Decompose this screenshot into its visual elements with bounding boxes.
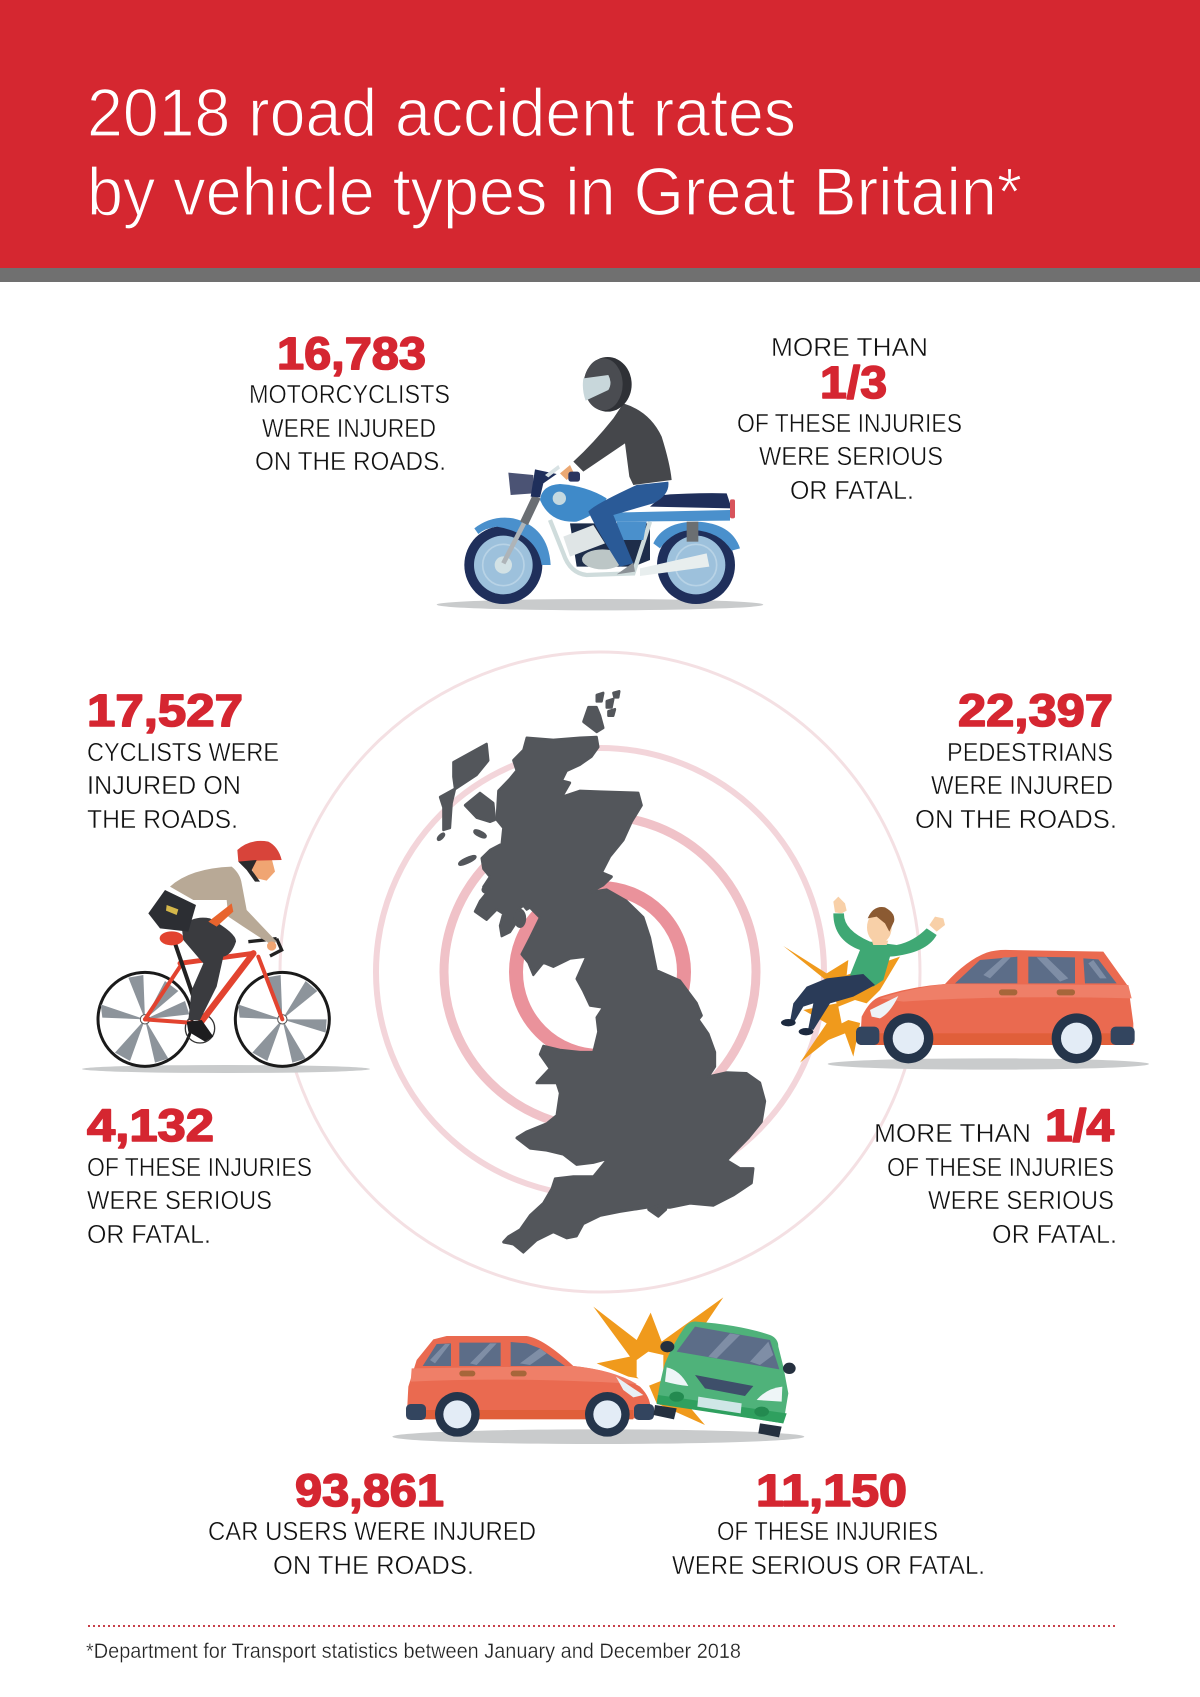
stat: cyclists serious injuries: 4,132 [87,1100,214,1151]
stat: cyclists [87,685,279,834]
stat: pedestrians serious share: OR FATAL. [992,1219,1117,1249]
stat: motorcyclists serious share: WERE SERIOUS [759,441,943,471]
stat: pedestrians: PEDESTRIANS [947,737,1113,767]
title: by vehicle types in Great Britain* [87,154,1022,230]
stat: motorcyclists serious share: 1/3 [820,357,887,408]
stat: car users serious injuries: 11,150 [756,1465,907,1516]
icon: car collision [392,1297,804,1444]
stat: cyclists: INJURED ON [87,770,241,800]
stat: motorcyclists: WERE INJURED [262,413,436,443]
stat: cyclists serious injuries: WERE SERIOUS [87,1185,272,1215]
stat: motorcyclists serious share: MORE THAN [771,332,928,362]
stat: car users: 93,861 [295,1465,444,1516]
title: 2018 road accident rates [87,75,796,151]
icon: pedestrian hit by car [781,897,1149,1070]
stat: pedestrians serious share: 1/4 [1045,1100,1114,1151]
stat: motorcyclists: ON THE ROADS. [255,446,446,476]
footnote: *Department for Transport statistics between January and December 2018 [86,1640,741,1663]
stat: pedestrians: WERE INJURED [931,770,1113,800]
header banner [0,0,1200,282]
stat: pedestrians: ON THE ROADS. [915,804,1117,834]
map of Great Britain [437,691,765,1252]
stat: cyclists: 17,527 [87,685,243,736]
icon: motorcycle and rider [437,357,763,610]
stat: car users: ON THE ROADS. [273,1550,474,1580]
stat: car users serious injuries: WERE SERIOUS OR FATAL. [672,1550,985,1580]
stat: pedestrians serious share: MORE THAN [874,1118,1031,1148]
stat: cyclists serious injuries [87,1100,312,1249]
stat: car users serious injuries: OF THESE INJURIES [717,1516,938,1546]
stat: motorcyclists serious share: OR FATAL. [790,475,914,505]
stat: car users [208,1465,536,1580]
stat: car users: CAR USERS WERE INJURED [208,1516,536,1546]
title [87,75,1022,230]
stat: pedestrians serious share: OF THESE INJURIES [887,1152,1114,1182]
stat: pedestrians: 22,397 [958,685,1113,736]
stat: pedestrians serious share: WERE SERIOUS [928,1185,1114,1215]
stat: cyclists serious injuries: OF THESE INJURIES [87,1152,312,1182]
icon: cyclist [82,841,370,1073]
stat: motorcyclists serious share [737,332,962,505]
stat: pedestrians serious share [874,1100,1117,1249]
stat: car users serious injuries [672,1465,985,1580]
concentric target rings [280,652,920,1292]
stat: motorcyclists: MOTORCYCLISTS [249,379,450,409]
stat: pedestrians [915,685,1117,834]
stat: cyclists: THE ROADS. [87,804,238,834]
stat: motorcyclists serious share: OF THESE INJURIES [737,408,962,438]
stat: cyclists serious injuries: OR FATAL. [87,1219,211,1249]
stat: cyclists: CYCLISTS WERE [87,737,279,767]
stat: motorcyclists: 16,783 [277,328,426,379]
stat: motorcyclists [249,328,450,476]
